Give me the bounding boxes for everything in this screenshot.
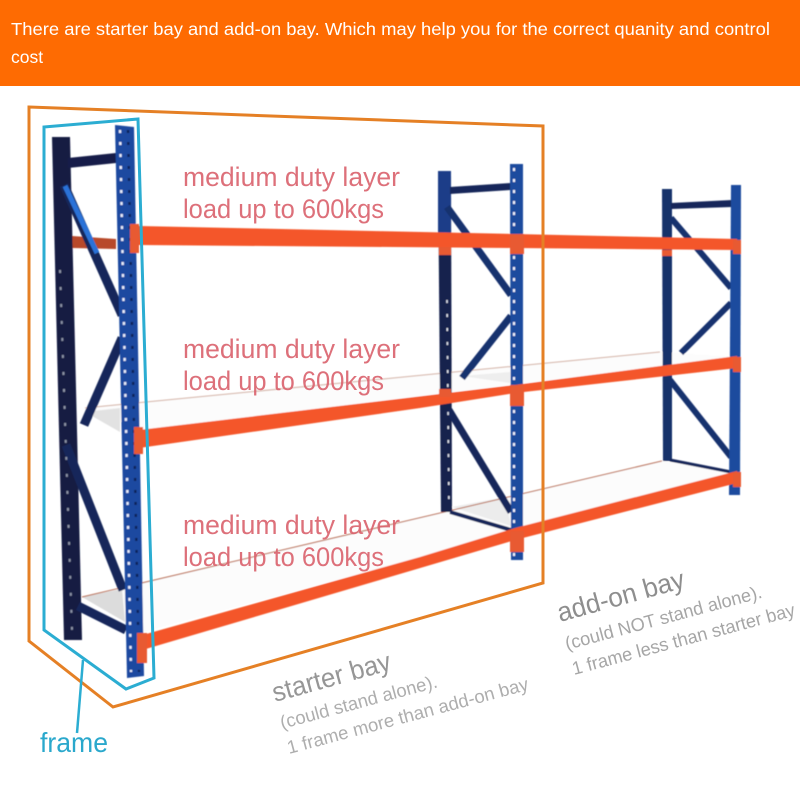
connector plates — [130, 224, 741, 663]
diagonals — [64, 185, 126, 630]
label: add-on bay: 1 frame less than starter bay — [570, 599, 798, 679]
frame 1: left — [52, 125, 144, 678]
outline: starter bay — [29, 107, 543, 707]
label: upper layer: load up to 600kgs — [183, 194, 384, 224]
middle beam — [139, 356, 737, 448]
header text: There are starter bay and add-on bay. Which may help you for the correct quanity and control — [11, 19, 770, 39]
label: lower layer: medium duty layer — [183, 510, 400, 540]
rear post — [52, 137, 82, 640]
leader line: frame — [77, 660, 83, 733]
label: middle layer: load up to 600kgs — [183, 366, 384, 396]
label: frame: frame — [40, 727, 108, 758]
outline: frame — [44, 119, 154, 689]
label: starter bay: 1 frame more than add-on bay — [285, 673, 531, 758]
header banner — [0, 0, 800, 86]
header text: cost — [11, 47, 43, 67]
upper beam — [139, 226, 737, 250]
cross bar — [68, 153, 116, 168]
frame 2: middle — [438, 164, 523, 560]
label: add-on bay: (could NOT stand alone). — [563, 581, 764, 654]
label: starter bay: starter bay — [269, 646, 395, 708]
label: upper layer: medium duty layer — [183, 162, 400, 192]
front post — [115, 125, 144, 678]
label: add-on bay — [554, 564, 798, 679]
frame 3: right — [662, 185, 741, 495]
lower beam — [139, 471, 737, 651]
label: lower layer: load up to 600kgs — [183, 542, 384, 572]
shelf decks — [82, 352, 737, 632]
label: middle layer: medium duty layer — [183, 334, 400, 364]
label: add-on bay: add-on bay — [554, 564, 688, 628]
shelving rack — [52, 125, 741, 678]
label: starter bay: (could stand alone). — [278, 671, 440, 733]
rear beam stub — [72, 236, 116, 249]
